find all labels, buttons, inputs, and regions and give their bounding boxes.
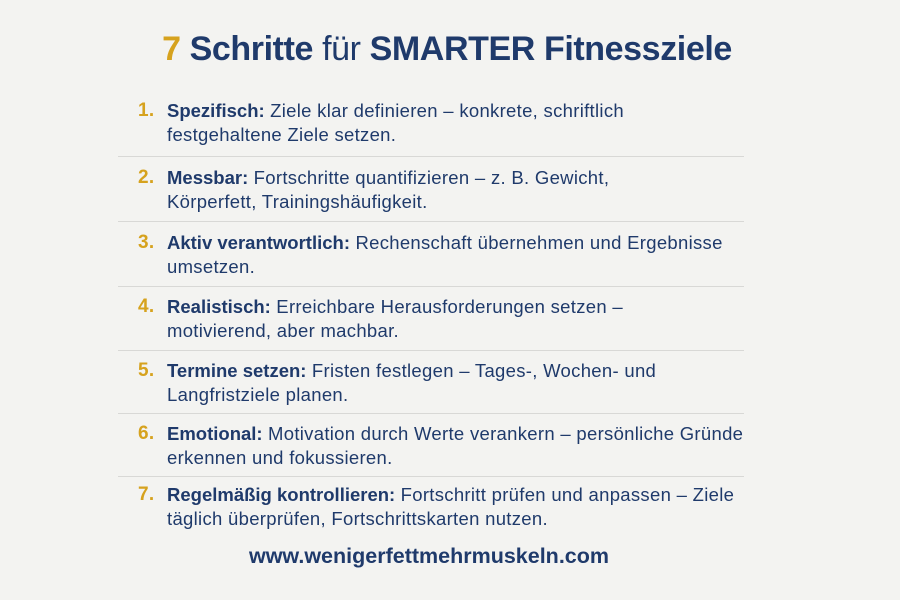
- item 6: 6.: [138, 423, 154, 444]
- item 6: [138, 423, 743, 468]
- item 5: Langfristziele planen.: [167, 384, 348, 405]
- item 3: Aktiv verantwortlich: Rechenschaft übernehmen und Ergebnisse: [167, 232, 723, 253]
- item 4: 4.: [138, 296, 154, 317]
- item 7: 7.: [138, 484, 154, 505]
- item 1: [138, 100, 624, 145]
- item 4: Realistisch: Erreichbare Herausforderungen setzen –: [167, 296, 623, 317]
- item 7: Regelmäßig kontrollieren: Fortschritt prüfen und anpassen – Ziele: [167, 484, 734, 505]
- title: 7 Schritte für SMARTER Fitnessziele: [162, 30, 732, 68]
- item 1: Spezifisch: Ziele klar definieren – konkrete, schriftlich: [167, 100, 624, 121]
- item 2: Körperfett, Trainingshäufigkeit.: [167, 191, 428, 212]
- item 4: motivierend, aber machbar.: [167, 320, 399, 341]
- item 5: [138, 360, 656, 405]
- item 2: 2.: [138, 167, 154, 188]
- item 7: [138, 484, 734, 529]
- item 4: [138, 296, 623, 341]
- item 5: 5.: [138, 360, 154, 381]
- item 6: erkennen und fokussieren.: [167, 447, 393, 468]
- item 2: Messbar: Fortschritte quantifizieren – z. B. Gewicht,: [167, 167, 609, 188]
- item 3: 3.: [138, 232, 154, 253]
- item 7: täglich überprüfen, Fortschrittskarten nutzen.: [167, 508, 548, 529]
- item 5: Termine setzen: Fristen festlegen – Tages-, Wochen- und: [167, 360, 656, 381]
- item 6: Emotional: Motivation durch Werte verankern – persönliche Gründe: [167, 423, 743, 444]
- item 3: [138, 232, 723, 277]
- footer url: www.wenigerfettmehrmuskeln.com: [249, 544, 609, 568]
- item 1: 1.: [138, 100, 154, 121]
- item 3: umsetzen.: [167, 256, 255, 277]
- item 2: [138, 167, 609, 212]
- item 1: festgehaltene Ziele setzen.: [167, 124, 396, 145]
